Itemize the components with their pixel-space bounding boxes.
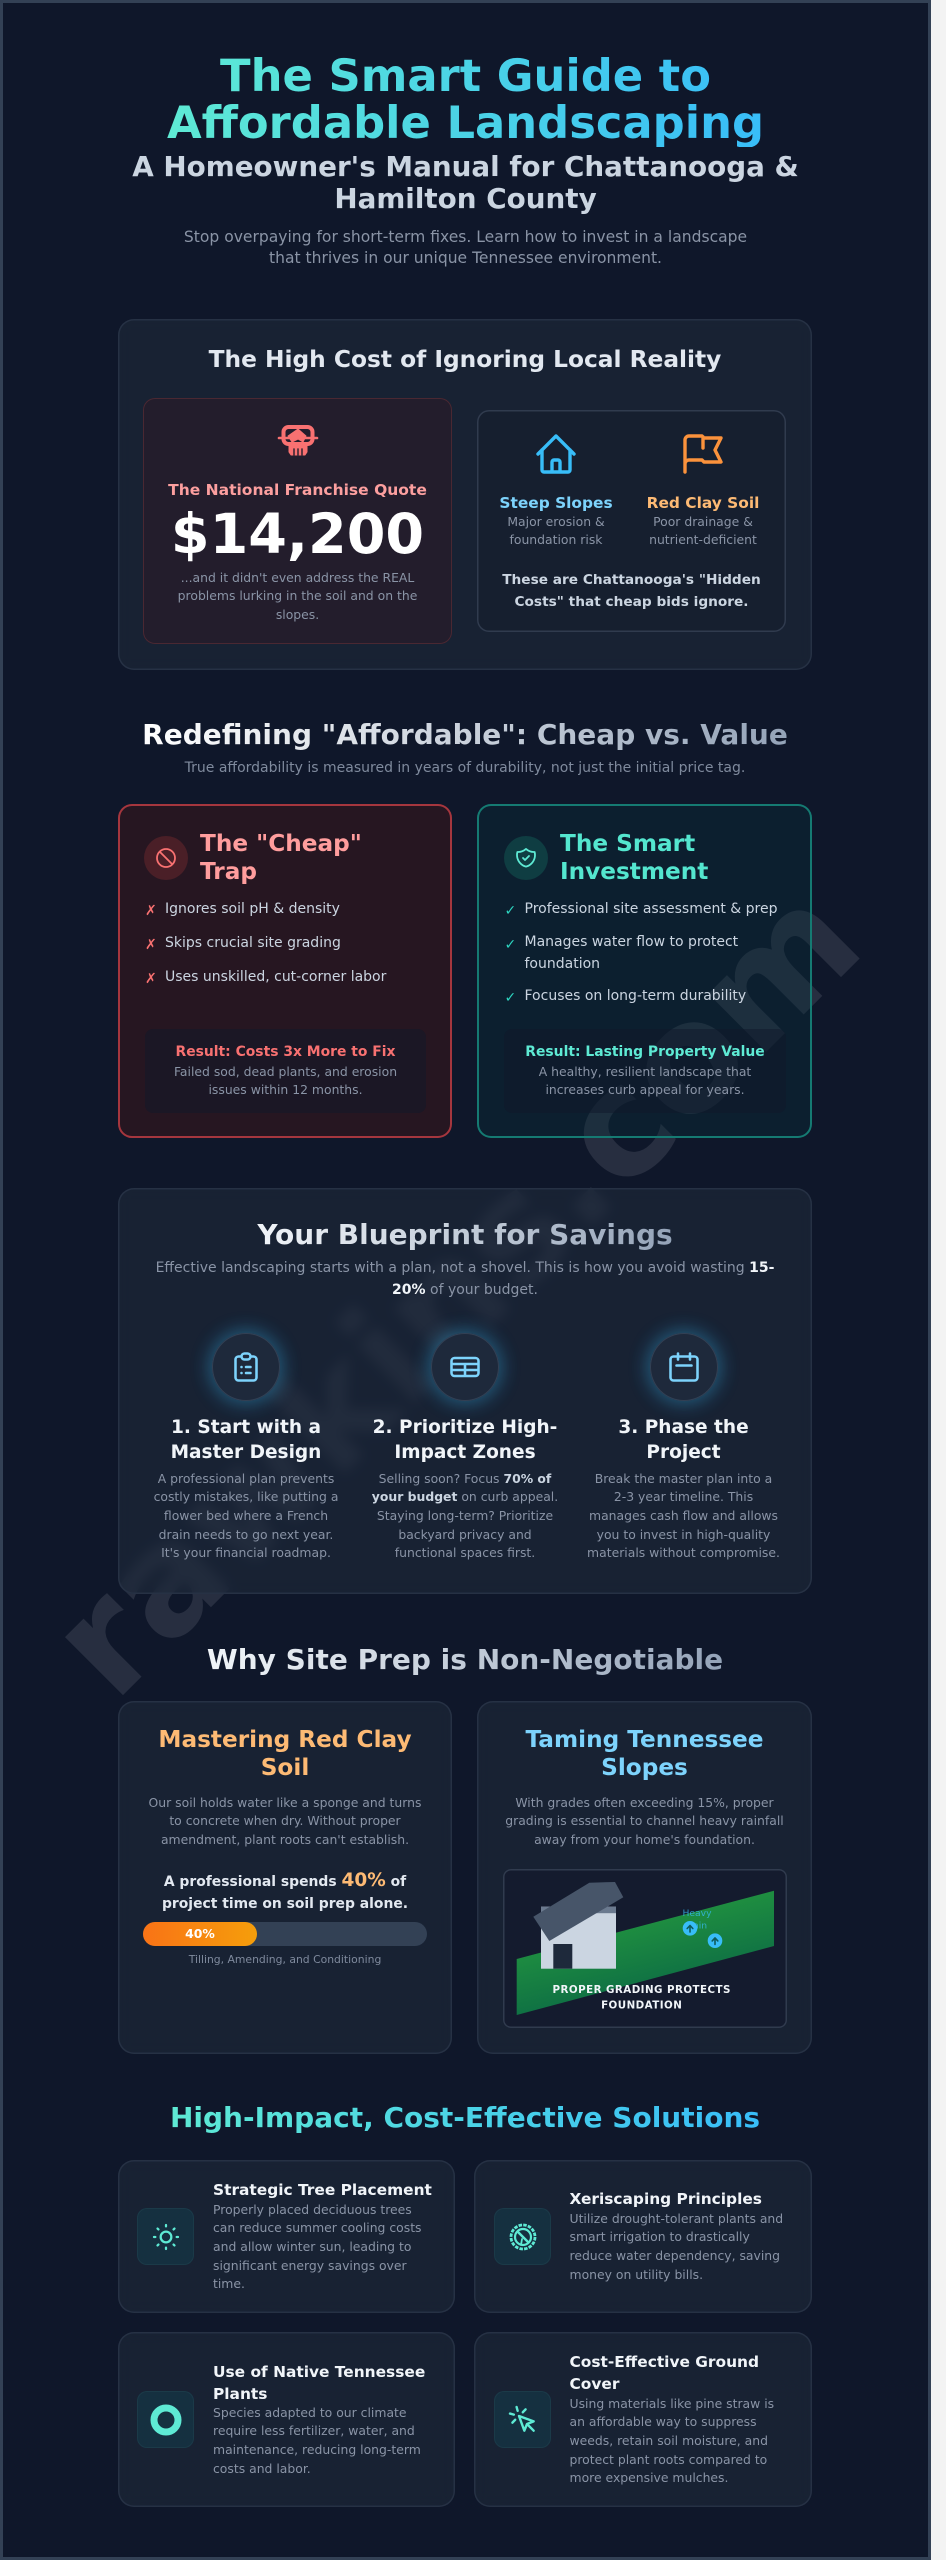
quote label: The National Franchise Quote bbox=[168, 481, 427, 499]
card title: Strategic Tree Placement bbox=[213, 2181, 432, 2199]
card title bbox=[570, 2352, 759, 2395]
result title: Result: Lasting Property Value bbox=[525, 1044, 765, 1060]
rain label: Heavy bbox=[682, 1908, 712, 1919]
card text: costs and labor. bbox=[213, 2461, 311, 2476]
house bbox=[533, 1882, 623, 1969]
result box bbox=[504, 1029, 786, 1113]
quote note: ...and it didn't even address the REAL bbox=[181, 570, 414, 585]
panel text bbox=[149, 1795, 421, 1847]
intro text: Stop overpaying for short-term fixes. Learn how to invest in a landscape bbox=[184, 228, 747, 246]
step 2 bbox=[372, 1416, 558, 1560]
step 1: 1. Start with a bbox=[171, 1416, 321, 1438]
card text: Species adapted to our climate bbox=[213, 2405, 407, 2420]
card text: and allow winter sun, leading to bbox=[213, 2239, 411, 2254]
step 3 bbox=[587, 1416, 780, 1560]
card: hidden costs bbox=[477, 410, 786, 632]
label: steep slopes bbox=[499, 494, 613, 547]
item: Uses unskilled, cut-corner labor bbox=[165, 969, 386, 985]
card text bbox=[213, 2405, 421, 2476]
heading: solutions: High-Impact, Cost-Effective Solutions bbox=[170, 2101, 760, 2134]
stat text: A professional spends 40% of bbox=[164, 1870, 406, 1891]
panel text: to concrete when dry. Without proper bbox=[169, 1813, 401, 1828]
step 2: Staying long-term? Prioritize bbox=[377, 1508, 553, 1523]
card text: Utilize drought-tolerant plants and bbox=[570, 2211, 783, 2226]
bar caption: Tilling, Amending, and Conditioning bbox=[189, 1953, 381, 1966]
panel title: The "Cheap" bbox=[200, 830, 362, 856]
panel title: Soil bbox=[261, 1754, 309, 1781]
icon: cursor click bbox=[494, 2391, 551, 2448]
icon: calendar bbox=[650, 1333, 718, 1401]
icon: skull warning bbox=[278, 425, 318, 456]
result text: increases curb appeal for years. bbox=[545, 1082, 745, 1097]
step 3: 2-3 year timeline. This bbox=[614, 1489, 753, 1504]
step 3: Break the master plan into a bbox=[595, 1470, 772, 1486]
card title: Cover bbox=[570, 2374, 619, 2392]
rain label: Rain bbox=[687, 1920, 707, 1931]
result text bbox=[174, 1064, 397, 1097]
card text: an affordable way to suppress bbox=[570, 2414, 757, 2429]
card text: more expensive mulches. bbox=[570, 2470, 728, 2485]
card text: can reduce summer cooling costs bbox=[213, 2220, 422, 2235]
step 2: Selling soon? Focus 70% of bbox=[379, 1470, 551, 1486]
icon: sun bbox=[137, 2208, 194, 2265]
card title: Use of Native Tennessee bbox=[213, 2363, 425, 2381]
title: Affordable Landscaping bbox=[167, 96, 764, 149]
item: ✓ bbox=[504, 937, 516, 953]
card text: Using materials like pine straw is bbox=[570, 2396, 774, 2411]
icon: ring bbox=[137, 2391, 194, 2448]
item: ✓ bbox=[504, 990, 516, 1006]
panel title bbox=[158, 1726, 412, 1781]
icon: ban bbox=[144, 836, 188, 880]
list of cheap traits bbox=[145, 901, 386, 987]
item: Ignores soil pH & density bbox=[165, 901, 340, 917]
quote price: $14,200 bbox=[171, 502, 424, 567]
watermark: rawkins.com bbox=[16, 853, 893, 1730]
label: red clay soil: Poor drainage & bbox=[653, 514, 753, 529]
card text: protect plant roots compared to bbox=[570, 2452, 767, 2467]
card: ground cover bbox=[474, 2332, 812, 2507]
item: foundation bbox=[524, 956, 600, 972]
step 3: 3. Phase the bbox=[618, 1416, 749, 1438]
item: ✗ bbox=[145, 971, 157, 987]
heading: redefining affordable: Redefining "Affordable": Cheap vs. Value bbox=[142, 718, 788, 751]
card text: money on utility bills. bbox=[570, 2267, 703, 2282]
card: xeriscaping principles bbox=[474, 2160, 812, 2313]
panel title bbox=[200, 830, 362, 885]
icon: xeriscape bbox=[494, 2208, 551, 2265]
panel title: Mastering Red Clay bbox=[158, 1726, 412, 1753]
hidden costs note bbox=[502, 572, 761, 610]
card text: time. bbox=[213, 2276, 245, 2291]
step 3: Project bbox=[646, 1442, 721, 1462]
step 1 bbox=[154, 1416, 338, 1560]
icon: table bbox=[431, 1333, 499, 1401]
hidden costs note: These are Chattanooga's "Hidden bbox=[502, 572, 761, 588]
icon: house bbox=[536, 434, 576, 474]
rain drop marker bbox=[708, 1933, 722, 1948]
card text: weeds, retain soil moisture, and bbox=[570, 2433, 768, 2448]
label: steep slopes: Major erosion & bbox=[507, 514, 605, 529]
step 1: It's your financial roadmap. bbox=[161, 1545, 331, 1560]
card text: Properly placed deciduous trees bbox=[213, 2202, 412, 2217]
diagram caption: PROPER GRADING PROTECTS bbox=[553, 1984, 731, 1996]
diagram caption: FOUNDATION bbox=[601, 1999, 682, 2011]
step 1: drain needs to go next year. bbox=[159, 1527, 333, 1542]
title: The Smart Guide to bbox=[220, 48, 711, 102]
panel: the cheap trap bbox=[118, 804, 452, 1138]
panel title bbox=[525, 1726, 764, 1781]
label: red clay soil: nutrient-deficient bbox=[649, 532, 757, 547]
progress bar bbox=[143, 1922, 427, 1946]
panel: taming tennessee slopes bbox=[477, 1701, 812, 2054]
progress fill bbox=[143, 1922, 257, 1946]
step 2: your budget on curb appeal. bbox=[372, 1489, 558, 1504]
step 1: flower bed where a French bbox=[164, 1508, 328, 1523]
card text: maintenance, reducing long-term bbox=[213, 2442, 421, 2457]
panel title: The Smart bbox=[560, 830, 695, 856]
step 3: you to invest in high-quality bbox=[597, 1527, 770, 1542]
quote note bbox=[178, 570, 417, 622]
step 1: costly mistakes, like putting a bbox=[154, 1489, 338, 1504]
result text: A healthy, resilient landscape that bbox=[539, 1064, 751, 1079]
icon: flag bbox=[683, 434, 723, 474]
card text bbox=[213, 2202, 422, 2291]
step 3: manages cash flow and allows bbox=[589, 1508, 778, 1523]
label: red clay soil: Red Clay Soil bbox=[647, 494, 759, 512]
panel text: Our soil holds water like a sponge and turns bbox=[149, 1795, 421, 1810]
step 1: Master Design bbox=[171, 1442, 321, 1462]
intro text bbox=[184, 228, 747, 267]
panel text: With grades often exceeding 15%, proper bbox=[515, 1795, 774, 1810]
card title: Cost-Effective Ground bbox=[570, 2353, 759, 2371]
panel text: away from your home's foundation. bbox=[534, 1832, 755, 1847]
hillside bbox=[517, 1891, 774, 2015]
heading: why site prep: Why Site Prep is Non-Negotiable bbox=[207, 1643, 723, 1676]
panel subtext bbox=[156, 1260, 774, 1298]
panel title: Taming Tennessee bbox=[525, 1726, 764, 1753]
item: Skips crucial site grading bbox=[165, 935, 341, 951]
title bbox=[167, 48, 764, 149]
card title: Xeriscaping Principles bbox=[570, 2190, 762, 2208]
card text: significant energy savings over bbox=[213, 2258, 407, 2273]
hidden costs note: Costs" that cheap bids ignore. bbox=[514, 594, 749, 610]
panel text: grading is essential to channel heavy rainfall bbox=[505, 1813, 784, 1828]
result text bbox=[538, 1064, 751, 1097]
panel text bbox=[505, 1795, 784, 1847]
label: red clay soil bbox=[647, 494, 759, 547]
subtitle: Hamilton County bbox=[334, 182, 597, 214]
intro text: that thrives in our unique Tennessee environment. bbox=[269, 249, 662, 267]
quote note: slopes. bbox=[276, 607, 319, 622]
item: Professional site assessment & prep bbox=[524, 901, 777, 917]
panel subtext: 20% of your budget. bbox=[392, 1282, 538, 1298]
panel text: amendment, plant roots can't establish. bbox=[161, 1832, 409, 1847]
icon: shield check bbox=[504, 836, 548, 880]
card text: smart irrigation to drastically bbox=[570, 2229, 750, 2244]
panel: blueprint for savings bbox=[118, 1188, 812, 1594]
result text: issues within 12 months. bbox=[208, 1082, 363, 1097]
card text bbox=[570, 2211, 783, 2282]
panel: the smart investment bbox=[477, 804, 812, 1138]
card title bbox=[213, 2363, 425, 2402]
panel: high cost of ignoring local reality bbox=[118, 319, 812, 670]
item: ✗ bbox=[145, 903, 157, 919]
icon: clipboard bbox=[212, 1333, 280, 1401]
panel title bbox=[560, 830, 708, 885]
step 1: A professional plan prevents bbox=[158, 1470, 334, 1486]
card text: require less fertilizer, water, and bbox=[213, 2423, 415, 2438]
step 2: Impact Zones bbox=[394, 1442, 536, 1462]
panel title: Slopes bbox=[601, 1754, 688, 1781]
item: ✓ bbox=[504, 903, 516, 919]
step 3: materials without compromise. bbox=[587, 1545, 780, 1560]
step 2: functional spaces first. bbox=[395, 1545, 535, 1560]
section subtext: True affordability is measured in years of durability, not just the initial price tag. bbox=[185, 760, 745, 776]
result title: Result: Costs 3x More to Fix bbox=[176, 1044, 395, 1060]
item: Manages water flow to protect bbox=[524, 934, 738, 950]
panel heading: Your Blueprint for Savings bbox=[257, 1218, 673, 1251]
panel heading: The High Cost of Ignoring Local Reality bbox=[209, 346, 721, 372]
label: steep slopes: foundation risk bbox=[510, 532, 602, 547]
list of smart traits bbox=[504, 901, 777, 1006]
panel title: Trap bbox=[200, 858, 257, 885]
item: Focuses on long-term durability bbox=[524, 988, 746, 1004]
panel subtext: Effective landscaping starts with a plan, not a shovel. This is how you avoid wasting 15- bbox=[156, 1260, 774, 1276]
item bbox=[504, 934, 738, 972]
card: national franchise quote bbox=[143, 398, 452, 644]
card: strategic tree placement bbox=[118, 2160, 455, 2313]
label: steep slopes: Steep Slopes bbox=[499, 494, 613, 512]
step 2: backyard privacy and bbox=[398, 1527, 532, 1542]
panel title: Investment bbox=[560, 858, 708, 885]
result text: Failed sod, dead plants, and erosion bbox=[174, 1064, 397, 1079]
card text: reduce water dependency, saving bbox=[570, 2248, 780, 2263]
slope diagram bbox=[503, 1869, 787, 2028]
result box bbox=[145, 1029, 426, 1113]
quote note: problems lurking in the soil and on the bbox=[178, 588, 417, 603]
progress fill: 40% bbox=[185, 1926, 215, 1941]
stat text: project time on soil prep alone. bbox=[162, 1896, 408, 1912]
panel: mastering red clay soil bbox=[118, 1701, 452, 2054]
card text bbox=[570, 2395, 774, 2488]
subtitle bbox=[132, 150, 799, 214]
rain drop marker bbox=[683, 1921, 697, 1936]
header bbox=[132, 48, 799, 267]
subtitle: A Homeowner's Manual for Chattanooga & bbox=[132, 150, 799, 183]
step 2: 2. Prioritize High- bbox=[373, 1416, 557, 1438]
stat text bbox=[162, 1870, 408, 1912]
item: ✗ bbox=[145, 937, 157, 953]
card: native plants bbox=[118, 2332, 455, 2507]
card title: Plants bbox=[213, 2384, 267, 2402]
